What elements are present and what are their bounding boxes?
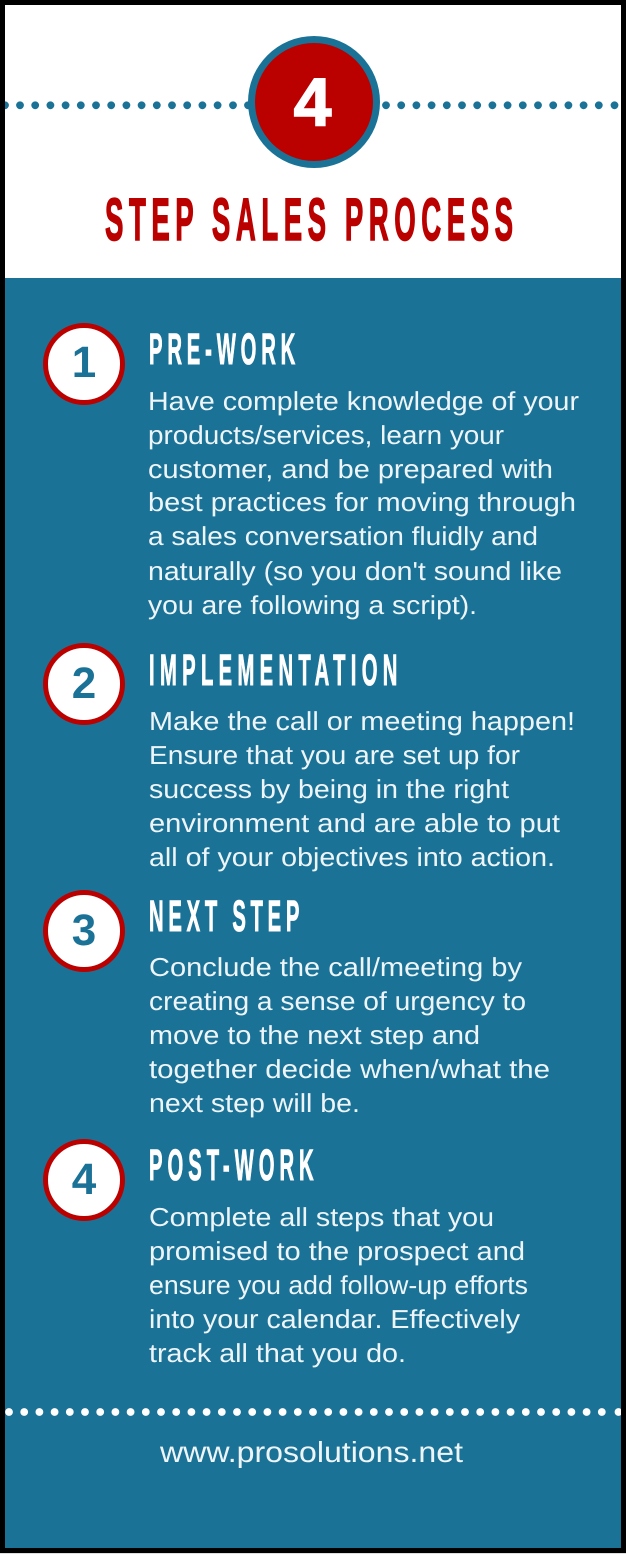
step 1 body text: customer, and be prepared with xyxy=(148,454,553,484)
step 2 body text: environment and are able to put xyxy=(149,808,561,838)
step 3 body text: move to the next step and xyxy=(149,1020,480,1050)
step 3 body text: next step will be. xyxy=(149,1088,360,1118)
dotted line: footer xyxy=(5,1408,622,1416)
step 3 body text xyxy=(149,952,550,1118)
step 1 xyxy=(46,325,579,620)
step 4 heading: POST-WORK xyxy=(149,1141,314,1190)
badge: big number 4 xyxy=(248,36,380,168)
dotted line: header xyxy=(1,101,618,109)
step 1 body text xyxy=(148,386,579,620)
step 1 body text: you are following a script). xyxy=(148,590,477,620)
step 3 xyxy=(46,892,550,1118)
step 1 body text: Have complete knowledge of your xyxy=(148,386,579,416)
step 2 body text: Ensure that you are set up for xyxy=(149,740,520,770)
step 4 badge xyxy=(46,1142,122,1218)
step 1 body text: best practices for moving through xyxy=(148,487,576,517)
footer url: www.prosolutions.net xyxy=(159,1437,463,1469)
step 3 body text: together decide when/what the xyxy=(149,1054,550,1084)
step 4 body text: Complete all steps that you xyxy=(149,1202,494,1232)
step 4 body text: into your calendar. Effectively xyxy=(149,1304,520,1334)
step 3 body text: Conclude the call/meeting by xyxy=(149,952,522,982)
step 4 body text xyxy=(149,1202,528,1368)
step 3 badge: 3 xyxy=(72,906,96,955)
step 1 heading: PRE-WORK xyxy=(149,325,295,374)
step 1 badge: 1 xyxy=(72,338,96,387)
step 4 xyxy=(46,1141,528,1368)
badge: big number 4: 4 xyxy=(294,64,332,140)
step 1 body text: products/services, learn your xyxy=(148,420,504,450)
step 2 xyxy=(46,646,575,872)
step 2 body text xyxy=(149,706,575,872)
step 2 body text: Make the call or meeting happen! xyxy=(149,706,575,736)
step 1 body text: a sales conversation fluidly and xyxy=(148,521,538,551)
step 3 body text: creating a sense of urgency to xyxy=(149,986,526,1016)
step 1 body text: naturally (so you don't sound like xyxy=(148,556,562,586)
step 4 body text: ensure you add follow-up efforts xyxy=(149,1270,528,1300)
step 1 badge xyxy=(46,326,122,402)
step 4 body text: track all that you do. xyxy=(149,1338,406,1368)
title: STEP SALES PROCESS xyxy=(105,186,513,253)
step 2 badge xyxy=(46,646,122,722)
step 2 body text: all of your objectives into action. xyxy=(149,842,555,872)
step 4 body text: promised to the prospect and xyxy=(149,1236,525,1266)
panel: white header xyxy=(5,5,621,278)
step 3 badge xyxy=(46,892,122,970)
step 2 body text: success by being in the right xyxy=(149,774,510,804)
step 4 badge: 4 xyxy=(72,1155,97,1204)
step 3 heading: NEXT STEP xyxy=(149,892,299,941)
step 2 badge: 2 xyxy=(72,659,96,708)
step 2 heading: IMPLEMENTATION xyxy=(149,646,397,695)
